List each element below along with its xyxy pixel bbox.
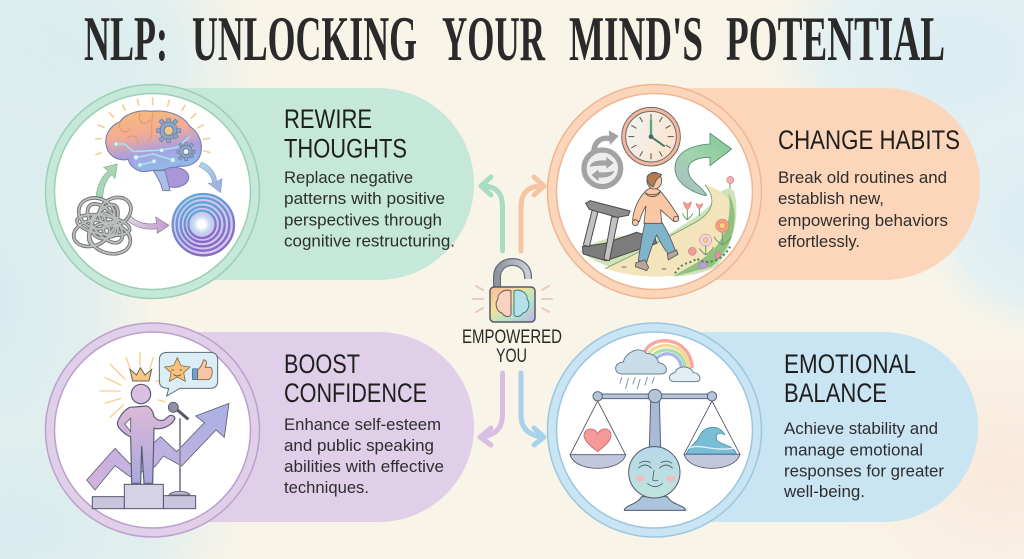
title [84, 3, 945, 74]
speaker [117, 384, 175, 483]
cycle icon [584, 150, 621, 187]
heading: emotional balance [784, 349, 916, 408]
text: emotional balance body: Achieve stability and [784, 420, 938, 438]
heading: emotional balance: BALANCE [784, 378, 887, 408]
ground and path [580, 189, 736, 276]
heading: change habits: CHANGE HABITS [778, 125, 960, 155]
text: change habits body [778, 169, 948, 251]
icon: brain, knot and spiral [71, 98, 235, 258]
microphone [177, 418, 183, 493]
flowers [683, 183, 731, 255]
heading: rewire thoughts: REWIRE [284, 104, 372, 134]
clouds [616, 350, 666, 374]
text: change habits body: effortlessly. [778, 233, 860, 251]
icon: speaker on podium [87, 352, 229, 509]
rays [100, 352, 167, 417]
scale beam [598, 394, 712, 399]
text: boost confidence body [284, 416, 444, 497]
arrow: to boost confidence [480, 373, 502, 445]
text: emotional balance body: manage emotional [784, 442, 923, 460]
walking person [632, 172, 679, 271]
icon: balance scale with face [570, 341, 740, 510]
icon ring: green [46, 84, 260, 298]
brain [106, 111, 201, 172]
podium [92, 484, 196, 509]
text: rewire thoughts body [284, 169, 455, 250]
right pan with wave [684, 401, 740, 454]
gears [157, 119, 195, 161]
crown [130, 368, 152, 381]
label: empowered you: YOU [496, 346, 527, 367]
panel: rewire thoughts [46, 84, 474, 298]
pill: emotional balance [654, 332, 978, 522]
title: YOUR [442, 3, 545, 74]
text: rewire thoughts body: cognitive restructuring. [284, 232, 455, 250]
brain rays [96, 98, 210, 155]
title: NLP: [84, 3, 168, 74]
icon ring: orange [548, 84, 762, 298]
heading: boost confidence [284, 349, 427, 408]
text: emotional balance body: responses for greater [784, 462, 945, 480]
text: boost confidence body: abilities with effective [284, 458, 444, 476]
arrow: to rewire thoughts [481, 177, 502, 251]
text: rewire thoughts body: Replace negative [284, 169, 413, 187]
rainbow [645, 341, 692, 368]
title: MIND'S [569, 3, 703, 74]
heading: rewire thoughts [284, 104, 407, 164]
heading: boost confidence: CONFIDENCE [284, 378, 427, 408]
text: boost confidence body: and public speaking [284, 437, 434, 455]
spiral [172, 193, 235, 257]
arrow: to emotional balance [521, 373, 544, 445]
balanced face [624, 497, 686, 510]
arrow: to change habits [521, 177, 544, 251]
heading: emotional balance: EMOTIONAL [784, 349, 916, 379]
label: empowered you [462, 327, 562, 367]
rain [620, 377, 654, 389]
text: emotional balance body [783, 420, 945, 501]
arrows [96, 164, 117, 197]
icon ring: purple [46, 323, 260, 537]
clock [622, 107, 680, 166]
rising chart arrow [87, 403, 229, 490]
title: UNLOCKING [192, 3, 417, 74]
icon ring: blue [548, 323, 762, 537]
pill: rewire thoughts [150, 88, 474, 280]
green swoosh arrow [675, 133, 732, 196]
treadmill [582, 201, 657, 261]
speech bubble [159, 352, 218, 396]
panel: change habits [548, 84, 980, 298]
icon: open padlock with brain [473, 262, 552, 322]
panel: boost confidence [46, 323, 474, 537]
pill: change habits [654, 88, 980, 280]
label: empowered you: EMPOWERED [462, 327, 562, 348]
text: rewire thoughts body: patterns with positive [284, 190, 445, 208]
center: empowered you [462, 177, 562, 445]
text: emotional balance body: well-being. [783, 483, 865, 501]
text: boost confidence body: Enhance self-esteem [284, 416, 441, 434]
icon: clock, treadmill and walker [580, 107, 736, 277]
pill: boost confidence [150, 332, 474, 522]
tangled knot [71, 192, 136, 258]
panel: emotional balance [548, 323, 978, 537]
left pan with heart [570, 401, 626, 455]
text: rewire thoughts body: perspectives through [284, 212, 442, 230]
text: change habits body: establish new, [778, 190, 884, 208]
heading: rewire thoughts: THOUGHTS [284, 134, 407, 164]
heading: boost confidence: BOOST [284, 349, 360, 379]
text: change habits body: Break old routines and [778, 169, 947, 187]
text: boost confidence body: techniques. [284, 479, 369, 497]
text: change habits body: empowering behaviors [778, 212, 948, 230]
